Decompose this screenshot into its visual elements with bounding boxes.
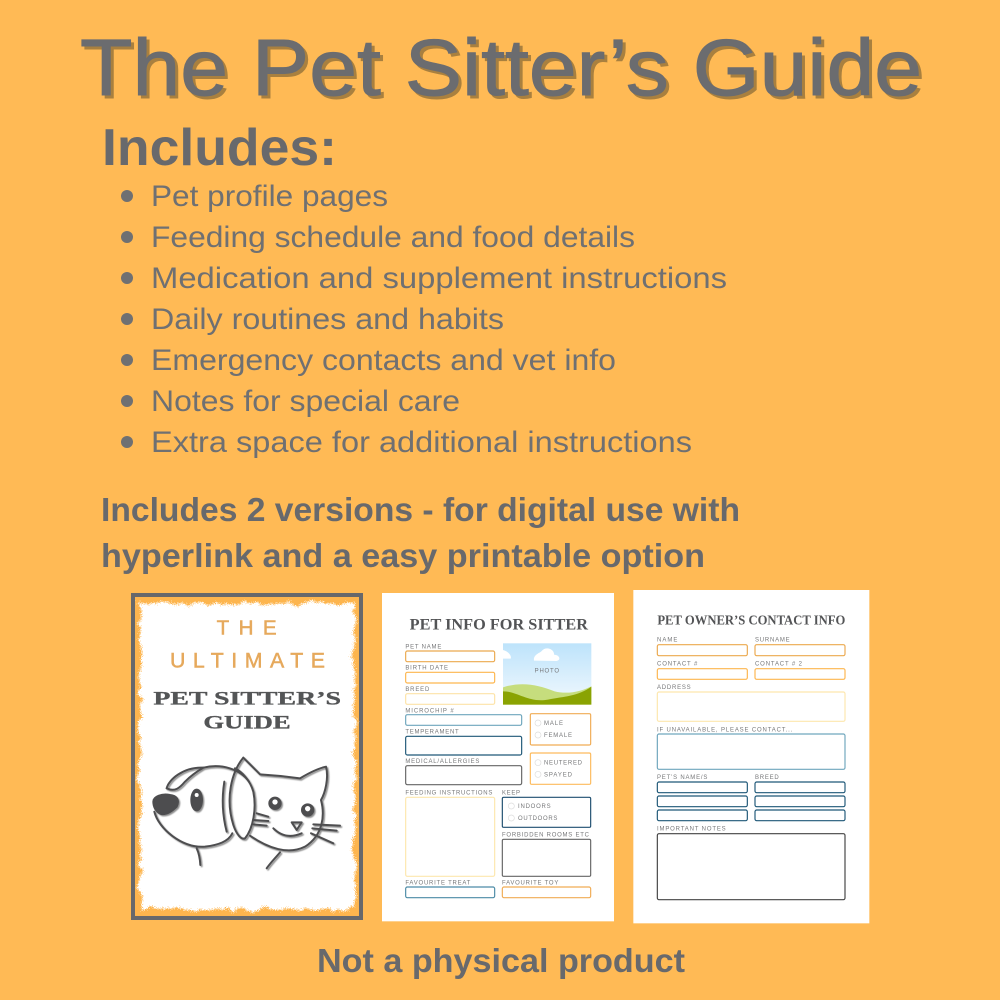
important notes field: IMPORTANT NOTES xyxy=(657,827,726,833)
title: The Pet Sitter’s Guide xyxy=(83,26,925,115)
favourite treat field: FAVOURITE TREAT xyxy=(405,880,471,886)
name fields xyxy=(657,638,845,656)
gender options: FEMALE xyxy=(544,733,572,739)
panel: guide cover xyxy=(133,595,361,918)
breed field: BREED xyxy=(405,687,430,693)
versions note xyxy=(101,491,740,574)
feeding instructions field xyxy=(405,790,495,876)
birth date field: BIRTH DATE xyxy=(405,666,448,672)
keep options: KEEP xyxy=(502,790,520,796)
alternate contact field xyxy=(657,727,845,769)
bullet list: Feeding schedule and food details xyxy=(151,221,635,254)
birth date field xyxy=(405,666,495,683)
footer note: Not a physical product xyxy=(317,942,685,979)
heading: includes: Includes: xyxy=(102,119,337,177)
favourite toy field xyxy=(502,880,591,898)
pet names and breeds table: PET’S NAME/S xyxy=(657,775,707,781)
important notes field xyxy=(657,827,845,900)
cover title: PET SITTER’S xyxy=(153,689,341,710)
forbidden rooms field: FORBIDDEN ROOMS ETC xyxy=(502,833,590,839)
cover title xyxy=(153,616,341,734)
medical field xyxy=(405,759,522,785)
keep options xyxy=(502,790,591,827)
address field xyxy=(657,685,845,721)
bullet list xyxy=(121,180,727,459)
photo placeholder xyxy=(503,643,591,705)
pet names and breeds table xyxy=(657,775,845,821)
neuter options xyxy=(530,753,591,784)
cover title: ULTIMATE xyxy=(170,648,325,672)
keep options: OUTDOORS xyxy=(518,816,557,822)
keep options: INDOORS xyxy=(518,804,551,810)
photo placeholder: PHOTO xyxy=(535,669,559,675)
rough white page xyxy=(140,604,354,909)
bullet list: Notes for special care xyxy=(151,385,460,418)
bullet list: Emergency contacts and vet info xyxy=(151,344,616,377)
address field: ADDRESS xyxy=(657,685,691,691)
contact fields: CONTACT # 2 xyxy=(755,662,803,668)
pet names and breeds table: BREED xyxy=(755,775,779,781)
contact fields xyxy=(657,662,845,679)
breed field xyxy=(405,687,495,704)
cover title: THE xyxy=(217,616,277,639)
form title: PET INFO FOR SITTER xyxy=(410,617,588,634)
feeding instructions field: FEEDING INSTRUCTIONS xyxy=(405,790,492,796)
gender options: MALE xyxy=(544,721,563,727)
microchip field: MICROCHIP # xyxy=(405,708,454,714)
form title: PET OWNER’S CONTACT INFO xyxy=(657,613,845,628)
gender options xyxy=(530,714,591,745)
favourite treat field xyxy=(405,880,495,898)
pet name field xyxy=(405,644,495,662)
panel: pet info form xyxy=(382,593,614,921)
neuter options: NEUTERED xyxy=(544,761,583,767)
cover title: GUIDE xyxy=(203,713,291,734)
versions note: Includes 2 versions - for digital use with xyxy=(101,491,740,528)
bullet list: Medication and supplement instructions xyxy=(151,262,727,295)
contact fields: CONTACT # xyxy=(657,662,698,668)
medical field: MEDICAL/ALLERGIES xyxy=(405,759,479,765)
panel: owner contact form xyxy=(633,590,869,923)
title: The Pet Sitter’s Guide xyxy=(80,23,922,112)
pet name field: PET NAME xyxy=(405,644,441,650)
forbidden rooms field xyxy=(502,833,591,876)
microchip field xyxy=(405,708,522,725)
temperament field: TEMPERAMENT xyxy=(405,730,459,736)
icon: dog and cat xyxy=(153,758,340,868)
name fields: SURNAME xyxy=(755,638,790,644)
versions note: hyperlink and a easy printable option xyxy=(101,537,705,574)
bullet list: Daily routines and habits xyxy=(151,303,504,336)
name fields: NAME xyxy=(657,638,677,644)
bullet list: Pet profile pages xyxy=(151,180,388,213)
bullet list: Extra space for additional instructions xyxy=(151,426,692,459)
neuter options: SPAYED xyxy=(544,773,573,779)
favourite toy field: FAVOURITE TOY xyxy=(502,880,558,886)
alternate contact field: IF UNAVAILABLE, PLEASE CONTACT... xyxy=(657,727,793,733)
temperament field xyxy=(405,730,522,755)
